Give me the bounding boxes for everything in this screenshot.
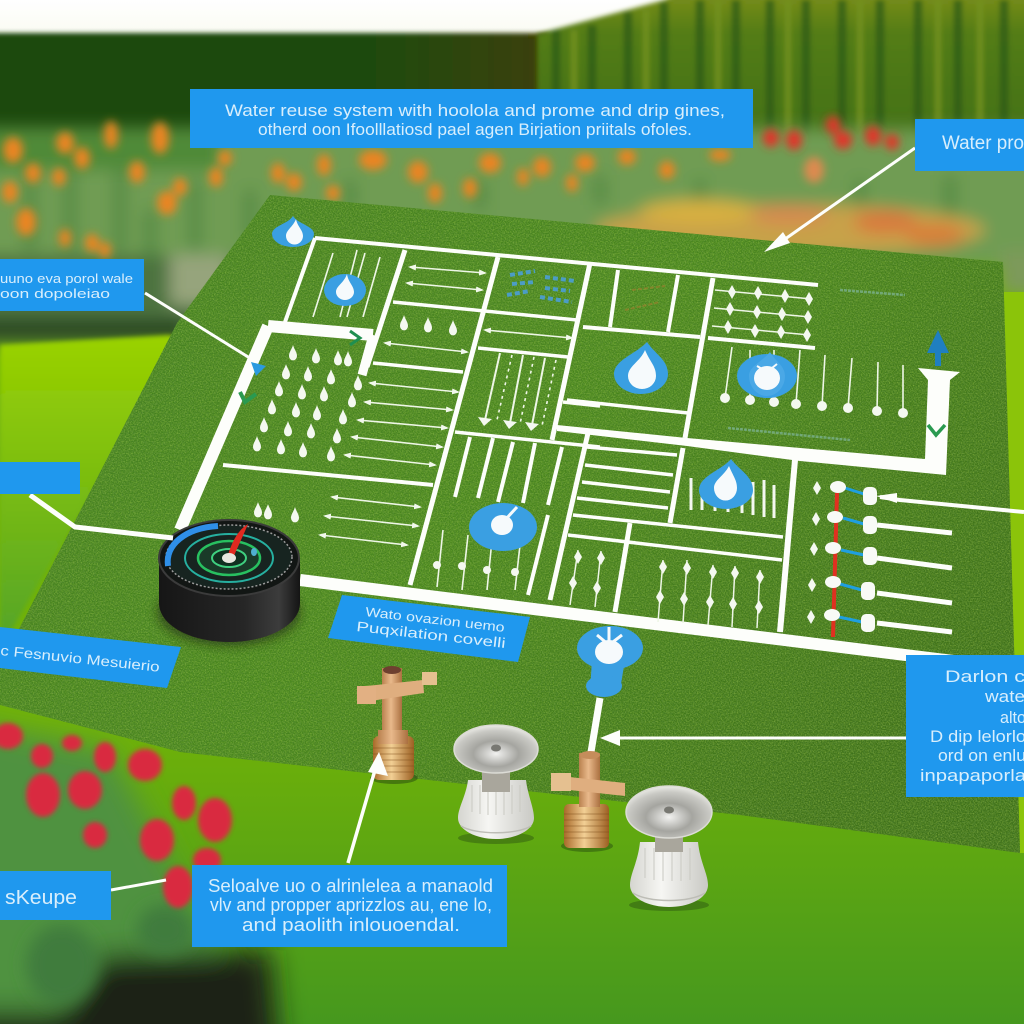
icon: brass manifold left — [357, 666, 437, 784]
drip arrowheads — [433, 393, 908, 576]
callout: left middle blank label — [0, 462, 80, 494]
icon: left pipe markers — [240, 362, 266, 402]
callout: center rotated — [328, 595, 530, 662]
blue plant marks — [507, 271, 575, 302]
sprinkler parts — [357, 666, 712, 911]
lower diamond emitters — [569, 550, 764, 628]
icon: blue arrow on riser — [927, 330, 949, 366]
callout: top description: otherd oon Ifoolllatiosd pael agen Birjation priitals ofoles. — [258, 120, 692, 139]
icon: water drop 5 — [699, 459, 753, 509]
callout: right: D dip lelorlo — [930, 727, 1024, 746]
callout: top description — [190, 89, 753, 148]
callout: right: wate — [984, 687, 1024, 706]
faint red marks — [625, 286, 665, 310]
icon: sprinkler head left — [454, 725, 538, 844]
faint plan notes — [728, 290, 905, 440]
sky — [0, 0, 1024, 50]
diamond rows — [712, 285, 813, 342]
arrow: bottom-left label — [111, 880, 166, 890]
panel: grass irrigation plan — [0, 195, 1020, 853]
icon: water drop 4 — [737, 352, 797, 398]
callout: left upper — [0, 259, 144, 311]
callout: top description: Water reuse system with hoolola and prome and drip gines, — [225, 101, 725, 120]
callout: top right — [915, 119, 1024, 171]
callout: bottom left — [0, 871, 111, 920]
icon: sprinkler head right — [626, 786, 712, 911]
callout: bottom description: vlv and propper aprizzlos au, ene lo, — [210, 895, 492, 915]
callout: center rotated: Wato ovazion uemo — [365, 604, 505, 635]
arrow: left callout to pipe — [145, 293, 253, 360]
vertical drip lines — [313, 250, 903, 590]
flower bed band — [0, 116, 1024, 345]
callout: top right: Water pro — [942, 133, 1024, 154]
callout: bottom description — [192, 865, 507, 947]
callout: center rotated: Puqxilation covelli — [356, 618, 507, 651]
bottom-left shrubs and flowers — [0, 720, 280, 1024]
icon: green check on riser — [928, 425, 945, 435]
callout: bottom left: sKeupe — [5, 887, 77, 909]
hedge: right striped — [537, 0, 1024, 160]
lime lawn left — [0, 335, 180, 650]
arrow: top right callout to plan — [764, 148, 915, 252]
icon: water drop 3 — [614, 342, 668, 394]
callout: left upper: oon dopoleiao — [0, 286, 110, 301]
arrow: right callout to manifold — [876, 493, 1024, 512]
short emitter bars — [691, 478, 774, 518]
arrow: bottom callout to manifold — [348, 752, 388, 863]
hedge: left — [0, 33, 550, 158]
double-headed flow arrows — [320, 267, 572, 545]
lime lawn right strip — [1003, 292, 1024, 853]
icon: water drop 2 — [324, 274, 366, 306]
callout: bottom description: and paolith inlouoendal. — [242, 915, 460, 935]
controller dial — [157, 520, 301, 646]
icon: brass manifold right — [551, 751, 625, 852]
main supply pipe with right riser — [557, 368, 960, 475]
callout: right: ord on enlu — [938, 746, 1024, 765]
plan pipe layout — [180, 238, 1010, 668]
drip manifold — [807, 481, 877, 637]
callout: bottom description: Seloalve uo o alrinlelea a manaold — [208, 876, 493, 896]
icon: water drop 6 — [469, 503, 537, 551]
sprinkler drop grid — [253, 315, 457, 522]
callout: right — [906, 655, 1024, 797]
arrow: left middle callout to controller — [30, 495, 173, 538]
arrow: right box to sprinkler stem — [600, 730, 907, 746]
callout arrows — [30, 148, 1024, 890]
callout: left upper: uuno eva porol wale — [0, 271, 133, 286]
icon: green chevron on pipe — [350, 331, 360, 345]
callout: left lower rotated — [0, 627, 181, 688]
icon: water drop 1 — [272, 216, 314, 247]
callout: left lower rotated: c Fesnuvio Mesuierio — [0, 642, 161, 675]
icon: sprinkler marker — [577, 626, 643, 752]
callout: right: inpapaporla — [920, 766, 1024, 785]
callout: right: Darlon c — [945, 667, 1024, 686]
